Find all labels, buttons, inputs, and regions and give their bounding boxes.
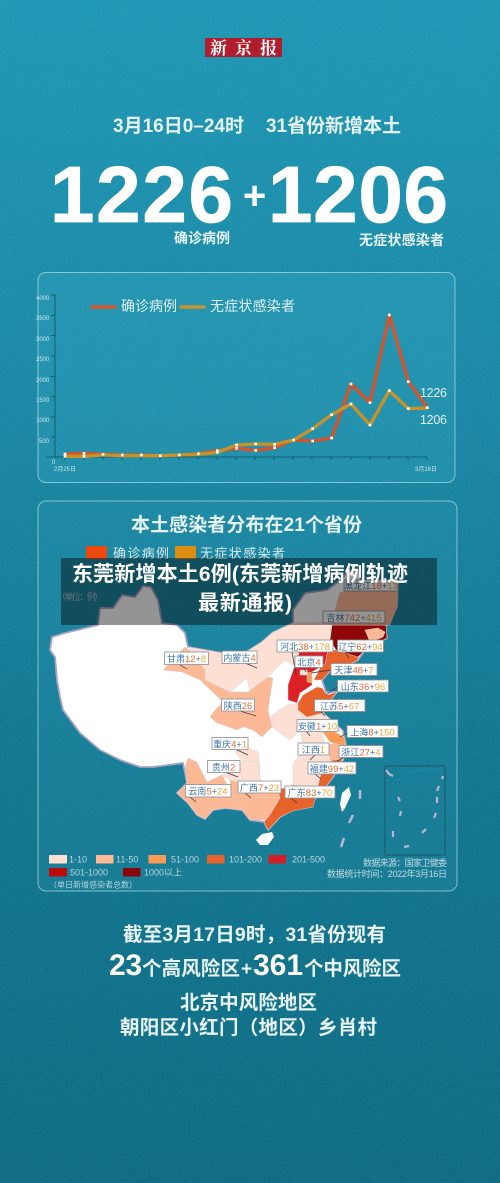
label: 北京: [295, 656, 323, 672]
end value labels: 1226: [420, 386, 447, 400]
line: confirmed cases: [65, 315, 427, 456]
label: 云南: [186, 784, 231, 802]
provinces: [163, 583, 398, 830]
summary text: risk areas: +: [241, 959, 252, 980]
label: 重庆: 重庆4+1: [213, 738, 247, 750]
label: 内蒙古: 内蒙古4: [223, 652, 256, 664]
chart axis labels: 3000: [36, 337, 50, 343]
label: 浙江: [337, 746, 383, 761]
label: 甘肃: 甘肃12+8: [167, 653, 206, 665]
summary text: risk areas: 23: [109, 949, 142, 982]
heading: date and scope: 3月16日0–24时: [113, 115, 244, 137]
label: 广西: [238, 781, 281, 798]
label: 吉林: 吉林742+415: [326, 612, 382, 624]
Beijing and Tianjin: [300, 670, 308, 675]
Taiwan and Hainan: [340, 787, 351, 812]
label: 广西: 广西7+23: [240, 782, 279, 794]
headline numbers: +: [243, 174, 266, 218]
chart axes: [46, 295, 427, 460]
chart legend: [92, 298, 295, 314]
province group: 101-200: [264, 785, 317, 830]
label: 福建: 福建99+42: [310, 763, 354, 775]
label: 重庆: [212, 738, 248, 755]
label: 陕西: [222, 699, 256, 716]
colour scale legend: 11-50: [116, 854, 138, 864]
data point markers: [64, 314, 429, 458]
province labels: [164, 580, 398, 803]
label: 江苏: [314, 700, 365, 716]
headline numbers: 1226: [50, 150, 233, 239]
province group: 51-100: [322, 730, 345, 746]
colour scale legend: （单日新增感染者总数）: [49, 880, 137, 890]
province group: 501-1000: [330, 625, 387, 657]
title overlay banner: [61, 558, 437, 625]
map category legend: 无症状感染者: [200, 546, 285, 561]
label: 安徽: 安徽1+10: [298, 720, 337, 732]
province group: 11-50: [163, 647, 230, 702]
South China Sea dashes: [341, 790, 360, 847]
data source note: 数据统计时间：2022年3月16日: [327, 868, 447, 879]
headline numbers: [50, 150, 448, 248]
chart axis labels: 2500: [36, 357, 50, 363]
label: 陕西: 陕西26: [224, 700, 252, 712]
end value labels: 1206: [420, 413, 447, 427]
label: 辽宁: 辽宁62+94: [338, 641, 383, 653]
label: 江西: [298, 743, 329, 760]
province group: 1-10: [188, 622, 336, 692]
title overlay banner: 最新通报): [198, 591, 292, 615]
label: 江西: 江西1: [302, 745, 325, 756]
label: 北京: 北京4: [297, 656, 321, 668]
summary text: risk areas: 北京中风险地区: [180, 991, 317, 1014]
chart axis labels: 1000: [36, 418, 50, 424]
chart axis labels: 3500: [36, 316, 50, 322]
summary text: risk areas: 截至3月17日9时，31省份现有: [123, 924, 386, 946]
chart axis labels: [36, 296, 437, 473]
summary text: risk areas: 个中风险区: [304, 957, 401, 980]
title overlay banner: 东莞新增本土6例(东莞新增病例轨迹: [72, 562, 408, 586]
chart legend: 确诊病例: [121, 298, 177, 314]
label: 浙江: 浙江27+4: [341, 746, 381, 758]
panel: trend line chart: [36, 272, 455, 482]
chart axis labels: 4000: [36, 296, 50, 302]
label: 贵州: [208, 760, 240, 777]
label: 上海: 上海8+150: [350, 726, 395, 738]
country outline: [50, 570, 398, 830]
summary text: risk areas: 361: [253, 949, 303, 982]
headline numbers: 确诊病例: [174, 230, 230, 246]
inset: South China Sea: [385, 766, 445, 855]
end value labels: [420, 386, 447, 427]
label: 福建: [308, 762, 356, 779]
chart axis labels: 2月25日: [54, 466, 76, 473]
map of China: [50, 570, 445, 855]
label: 广东: 广东83+70: [288, 787, 332, 799]
summary text: risk areas: 个高风险区: [142, 957, 240, 980]
chart axis labels: 0: [52, 460, 56, 466]
label: 山东: [326, 680, 388, 695]
label: 云南: 云南5+24: [188, 786, 228, 798]
label: 黑龙江: 黑龙江18+13: [344, 580, 398, 592]
data source note: [327, 857, 447, 879]
heading: date and scope: 31省份新增本土: [266, 115, 401, 137]
colour scale legend: 1000以上: [144, 868, 182, 878]
label: 广东: [285, 786, 335, 803]
colour scale legend: 51-100: [171, 854, 199, 864]
Heilongjiang: [332, 583, 398, 625]
colour scale legend: 101-200: [229, 854, 262, 864]
colour scale legend: 201-500: [292, 854, 325, 864]
summary text: risk areas: 朝阳区小红门（地区）乡肖村: [120, 1016, 377, 1039]
chart axis labels: 2000: [36, 378, 50, 384]
map category legend: 确诊病例: [113, 546, 169, 561]
label: 河北: [277, 640, 333, 674]
label: 上海: [340, 726, 398, 738]
label: 甘肃: [164, 652, 208, 669]
label: 安徽: [297, 720, 338, 736]
label: 天津: [311, 664, 377, 676]
label: 内蒙古: [222, 651, 257, 668]
chart legend: 无症状感染者: [210, 298, 295, 314]
summary text: risk areas: [109, 924, 401, 1039]
line: asymptomatic cases: [65, 391, 427, 456]
label: 江苏: 江苏5+67: [320, 700, 359, 712]
headline numbers: 无症状感染者: [359, 232, 444, 248]
unit note: （单位：例）: [57, 591, 103, 602]
chart axis labels: 3月16日: [415, 466, 437, 473]
colour scale legend: [49, 854, 325, 890]
label: 河北: 河北38+178: [280, 641, 330, 653]
logo: 新京报: 新京报: [210, 38, 277, 58]
panel: province distribution map: [38, 501, 457, 891]
label: 山东: 山东36+96: [341, 681, 385, 693]
colour scale legend: 501-1000: [70, 868, 108, 878]
label: 贵州: 贵州2: [212, 762, 235, 774]
colour scale legend: 1-10: [69, 854, 87, 864]
map heading: 本土感染者分布在21个省份: [131, 514, 362, 536]
heading: date and scope: [113, 115, 401, 137]
province group: 201-500: [288, 650, 328, 703]
label: 辽宁: [338, 640, 384, 658]
data source note: 数据来源：国家卫健委: [363, 857, 447, 868]
map category legend: [86, 546, 285, 561]
headline numbers: 1206: [268, 150, 448, 239]
chart axis labels: 1500: [36, 398, 50, 404]
label: 天津: 天津48+7: [334, 666, 374, 676]
chart axis labels: 500: [39, 439, 50, 445]
